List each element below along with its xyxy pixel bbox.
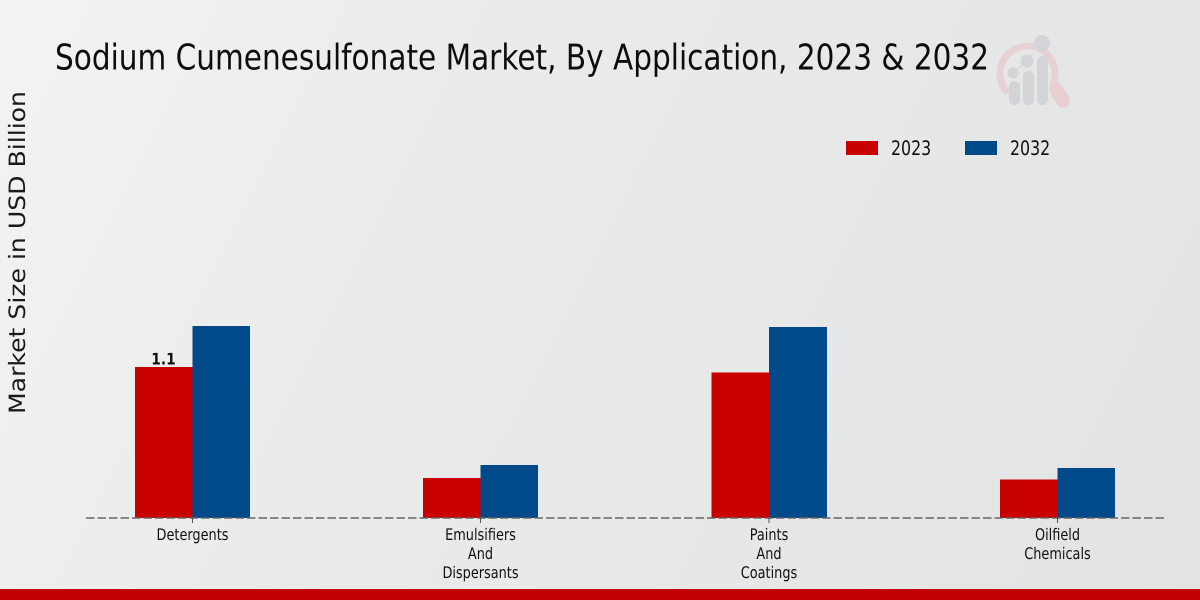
legend item: 2032: 2032: [1010, 136, 1050, 160]
category label: Emulsifiers And Dispersants: And: [468, 544, 493, 563]
legend item: 2023: [846, 136, 931, 160]
category label: Emulsifiers And Dispersants: Emulsifiers: [445, 525, 516, 544]
bars: Paints And Coatings: [712, 327, 827, 518]
category label: Oilfield Chemicals: Oilfield: [1035, 525, 1080, 544]
category label: Paints And Coatings: Coatings: [741, 563, 797, 582]
legend: [846, 136, 1050, 160]
icon: magnifier logo watermark: [1000, 35, 1063, 105]
bar chart: [86, 326, 1164, 523]
category label: Oilfield Chemicals: [1024, 525, 1091, 563]
bars: Emulsifiers And Dispersants: [423, 465, 538, 518]
category label: Emulsifiers And Dispersants: [442, 525, 519, 582]
category label: Paints And Coatings: And: [756, 544, 782, 563]
data label: 1.1: 1.1: [151, 350, 176, 368]
legend item: 2023: 2023: [891, 136, 931, 160]
bars: Detergents: [135, 326, 250, 518]
category label: Detergents: Detergents: [157, 525, 228, 544]
category label: Paints And Coatings: Paints: [750, 525, 788, 544]
footer bar: [0, 589, 1200, 600]
category label: Emulsifiers And Dispersants: Dispersants: [442, 563, 519, 582]
category label: Paints And Coatings: [741, 525, 797, 582]
title: Sodium Cumenesulfonate Market, By Application, 2023 & 2032: [55, 38, 989, 78]
legend item: 2032: [965, 136, 1050, 160]
y axis label: Market Size in USD Billion: [5, 91, 31, 414]
x axis baseline: [86, 517, 1164, 519]
category label: Oilfield Chemicals: Chemicals: [1024, 544, 1091, 563]
bars: Oilfield Chemicals: [1000, 468, 1115, 518]
